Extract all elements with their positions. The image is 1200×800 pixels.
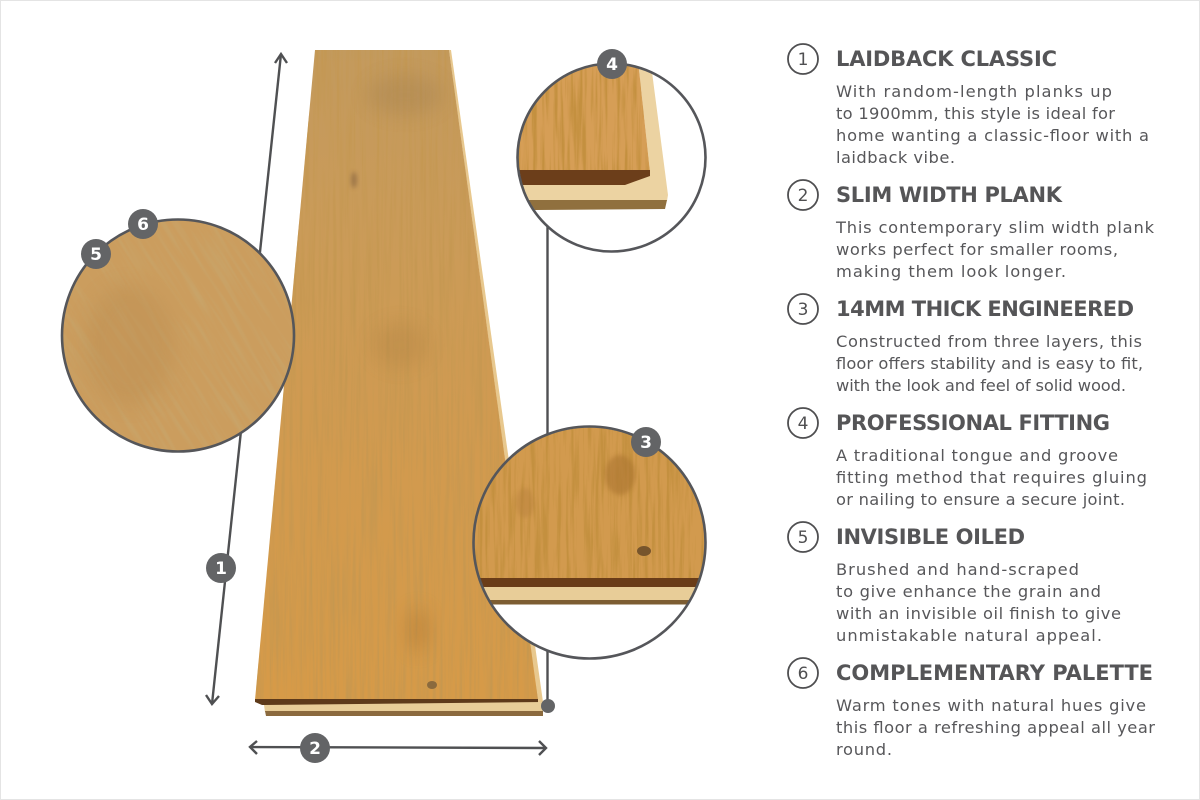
- number 4: [788, 408, 818, 438]
- plank face: [255, 50, 538, 700]
- badge 1: [206, 553, 236, 583]
- pale core and edge: [523, 69, 668, 201]
- badge 1: 1: [215, 559, 227, 579]
- knots: [605, 455, 635, 495]
- number 3: 3: [798, 300, 808, 320]
- description: Constructed from three layers, this: [836, 332, 1142, 351]
- number 4: 4: [798, 414, 808, 434]
- description: Warm tones with natural hues give: [836, 696, 1146, 715]
- heading: INVISIBLE OILED: [836, 525, 1025, 549]
- badge 2: [300, 733, 330, 763]
- description: A traditional tongue and groove: [836, 446, 1118, 465]
- zoom circle: thickness detail: [472, 425, 707, 660]
- leader line from plank edge to zoom circles: [546, 222, 549, 706]
- badge 5: 5: [90, 245, 102, 265]
- badge 3: [631, 427, 661, 457]
- description: This contemporary slim width plank: [835, 218, 1155, 237]
- lower band: [485, 600, 695, 604]
- leader dot: [541, 699, 555, 713]
- wood grain: [518, 66, 650, 170]
- badge 6: 6: [137, 215, 149, 235]
- number 3: [788, 294, 818, 324]
- description: fitting method that requires gluing: [836, 468, 1147, 487]
- description: or nailing to ensure a secure joint.: [836, 490, 1125, 509]
- feature 5: invisible oiled: [788, 522, 1121, 645]
- description: [836, 696, 1155, 759]
- number 1: [788, 44, 818, 74]
- description: laidback vibe.: [836, 148, 955, 167]
- description: Brushed and hand-scraped: [836, 560, 1079, 579]
- description: [836, 82, 1149, 167]
- wood face: [470, 420, 710, 580]
- description: [836, 560, 1121, 645]
- description: to 1900mm, this style is ideal for: [836, 104, 1115, 123]
- description: works perfect for smaller rooms,: [836, 240, 1118, 259]
- description: [835, 218, 1155, 281]
- badge 6: [128, 209, 158, 239]
- plank core: [264, 702, 543, 712]
- badge 4: [597, 49, 627, 79]
- badge 3: 3: [640, 433, 652, 453]
- oak plank: [255, 50, 543, 716]
- heading: LAIDBACK CLASSIC: [836, 47, 1057, 71]
- description: [836, 332, 1143, 395]
- heading: SLIM WIDTH PLANK: [836, 183, 1063, 207]
- heading: 14MM THICK ENGINEERED: [836, 297, 1134, 321]
- badge 4: 4: [606, 55, 618, 75]
- description: home wanting a classic-floor with a: [836, 126, 1149, 145]
- description: with an invisible oil finish to give: [836, 604, 1121, 623]
- plank groove: [255, 699, 538, 705]
- badge 2: 2: [309, 739, 321, 759]
- wood grain: [476, 428, 704, 578]
- zoom circle: surface grain: [60, 218, 296, 453]
- description: With random-length planks up: [836, 82, 1112, 101]
- plank bevel edge: [449, 50, 543, 702]
- number 2: [788, 180, 818, 210]
- description: floor offers stability and is easy to fit,: [836, 354, 1143, 373]
- feature 3: 14mm thick engineered: [788, 294, 1143, 395]
- dark groove: [510, 170, 650, 185]
- number 6: [788, 658, 818, 688]
- wood face: [519, 66, 650, 170]
- heading: PROFESSIONAL FITTING: [836, 411, 1110, 435]
- plank tongue base: [265, 711, 543, 716]
- feature 4: professional fitting: [788, 408, 1147, 509]
- number 6: 6: [798, 664, 808, 684]
- description: with the look and feel of solid wood.: [836, 376, 1126, 395]
- description: [836, 446, 1147, 509]
- feature 2: slim width plank: [788, 180, 1155, 281]
- description: round.: [836, 740, 892, 759]
- feature 6: complementary palette: [788, 658, 1155, 759]
- feature 1: laidback classic: [788, 44, 1149, 167]
- description: to give enhance the grain and: [836, 582, 1101, 601]
- number 5: [788, 522, 818, 552]
- number 2: 2: [798, 186, 808, 206]
- arrow 1: plank length: [206, 54, 287, 704]
- badge 5: [81, 239, 111, 269]
- dark groove: [470, 578, 710, 587]
- heading: COMPLEMENTARY PALETTE: [836, 661, 1153, 685]
- description: making them look longer.: [836, 262, 1066, 281]
- description: unmistakable natural appeal.: [836, 626, 1102, 645]
- plank grain: [256, 50, 538, 699]
- description: this floor a refreshing appeal all year: [836, 718, 1155, 737]
- zoom circle: edge detail: [516, 63, 707, 253]
- pale core: [484, 587, 696, 600]
- number 5: 5: [798, 528, 808, 548]
- lower band: [528, 200, 667, 210]
- arrow 2: plank width: [250, 741, 546, 755]
- number 1: 1: [798, 50, 808, 70]
